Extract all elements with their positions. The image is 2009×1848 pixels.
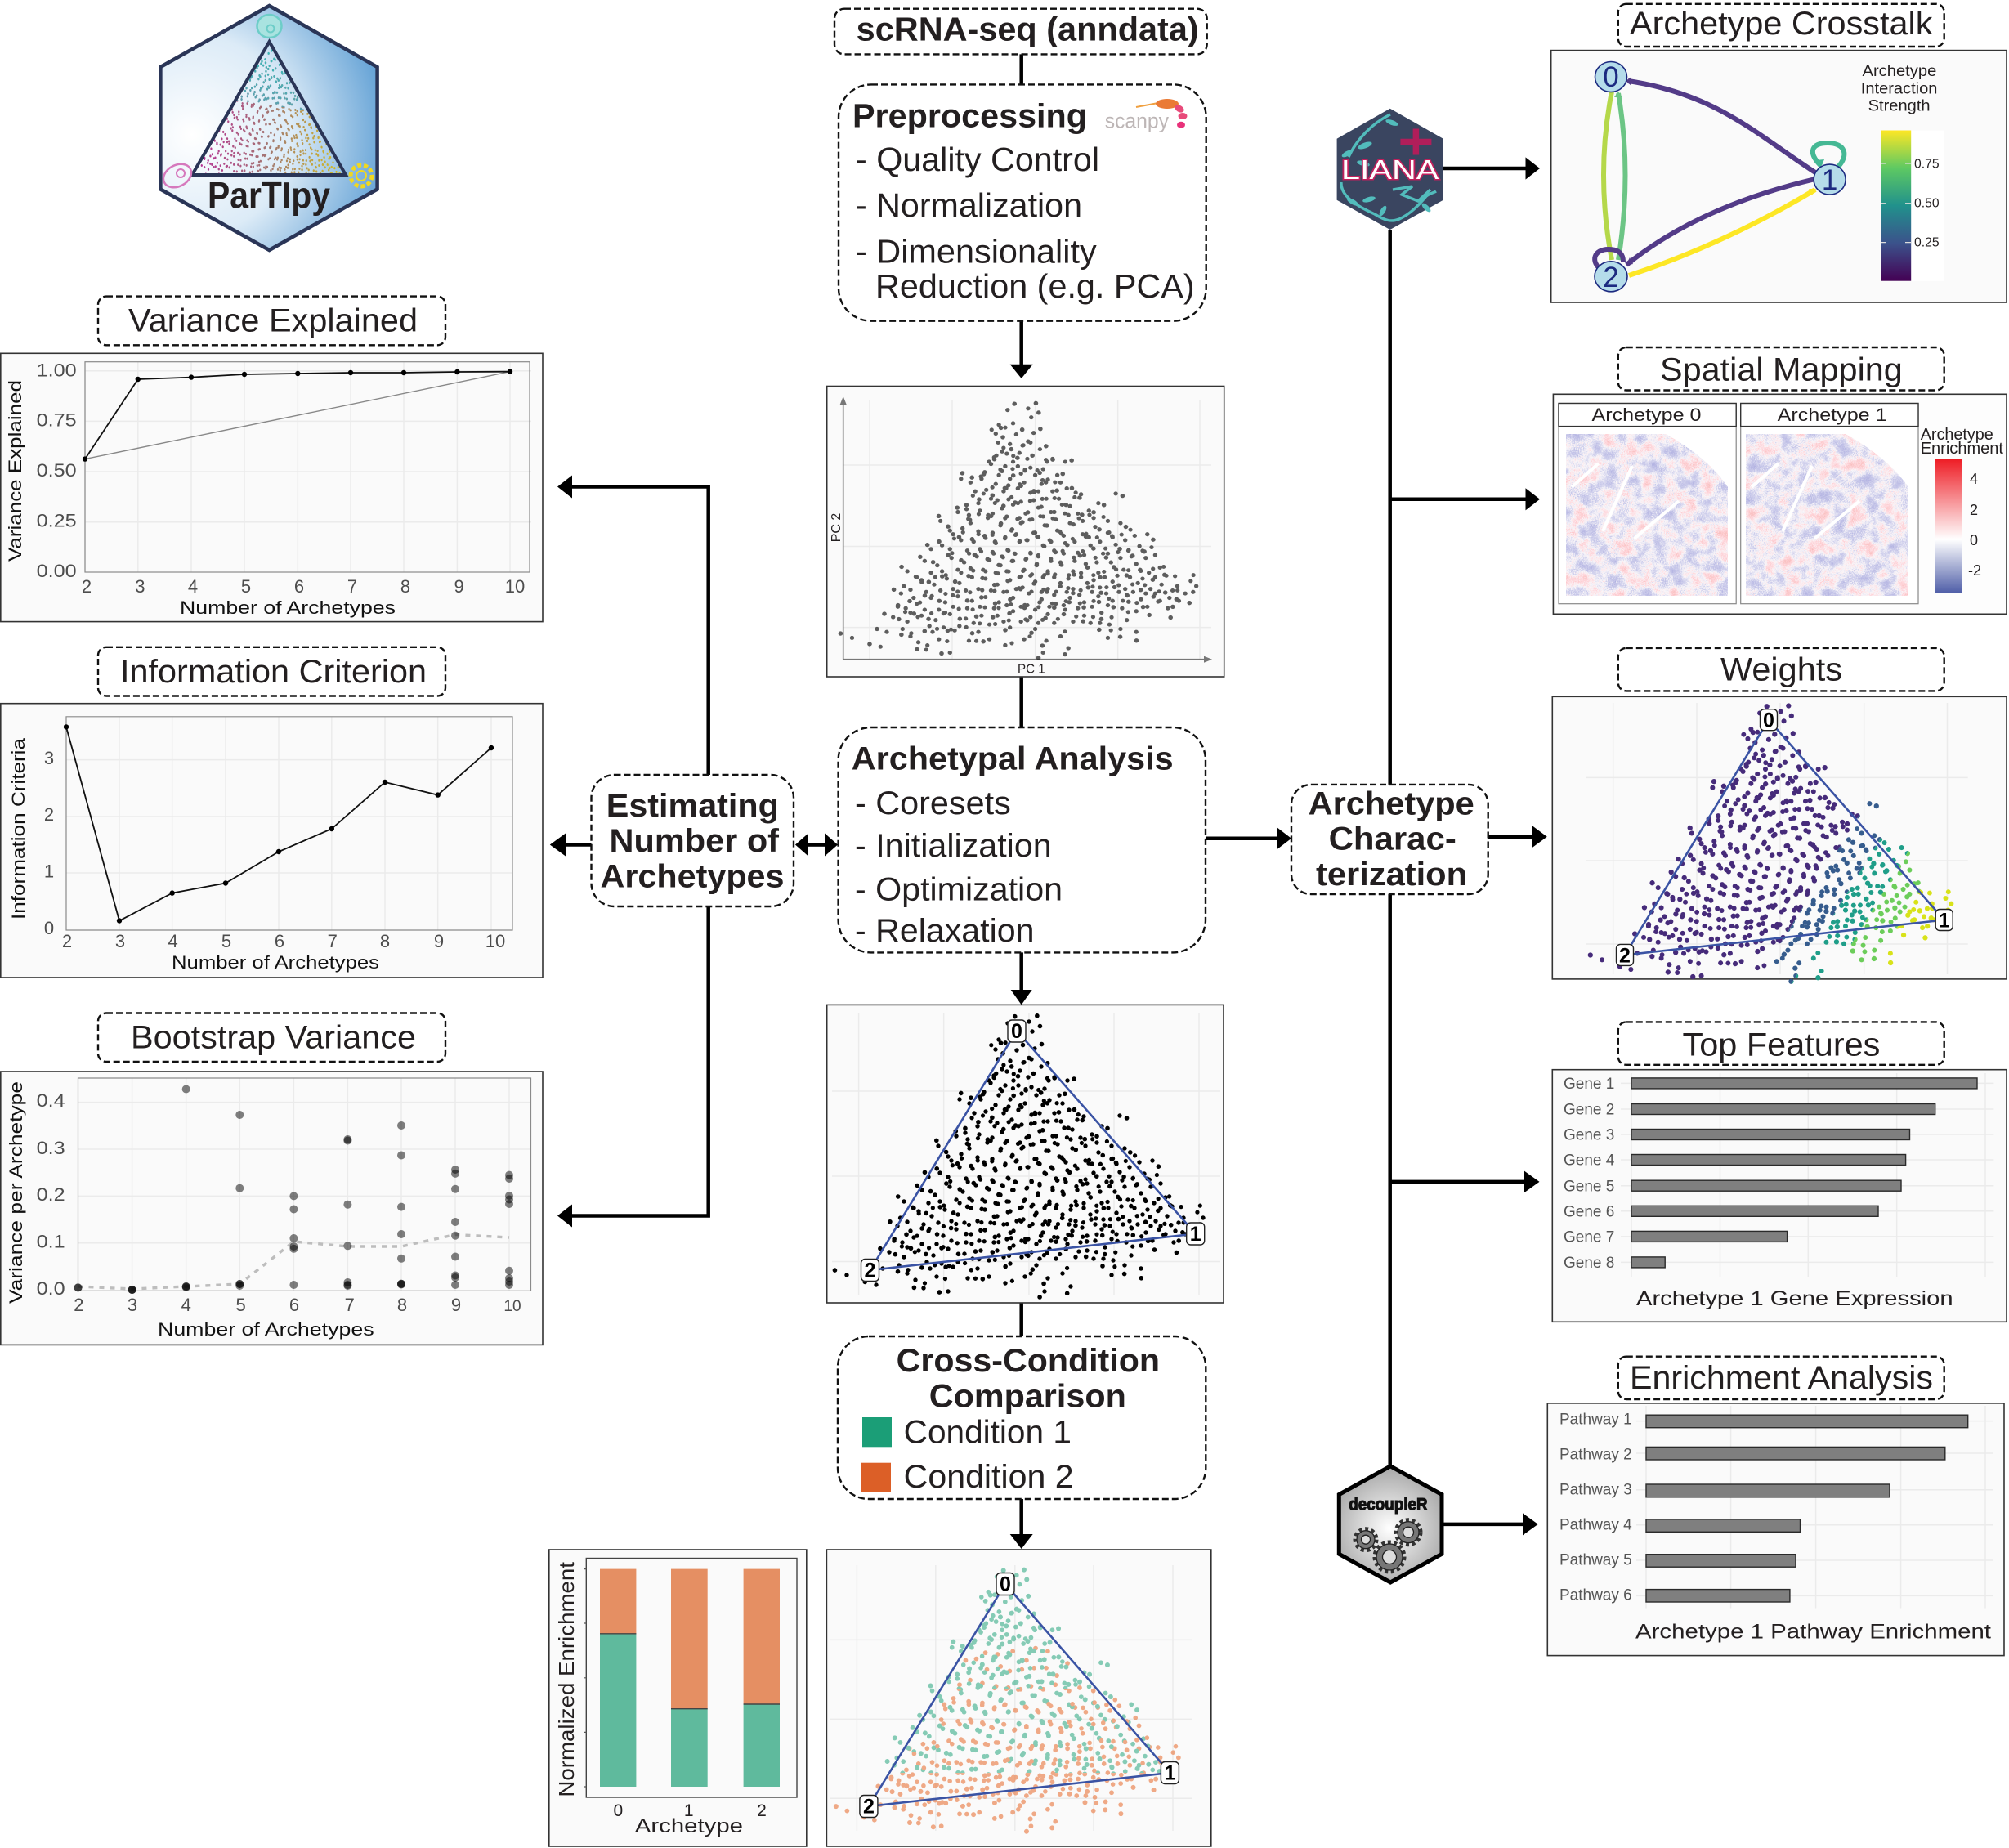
label: archetype 1: 1 <box>1164 1762 1175 1785</box>
panel: variance explained chart: Variance Explained <box>5 380 25 562</box>
mean line <box>78 1234 509 1289</box>
legend: interaction strength: Strength <box>1868 98 1931 115</box>
heading: bootstrap variance: Bootstrap Variance <box>131 1020 416 1056</box>
panel: information criterion chart: 10 <box>485 931 505 951</box>
heading: variance explained <box>98 297 445 345</box>
legend: interaction strength: Archetype <box>1862 63 1936 80</box>
box: preprocessing: Reduction (e.g. PCA) <box>875 267 1195 305</box>
facet: archetype 1: Archetype 1 <box>1778 405 1887 425</box>
points: per-archetype variance <box>74 1085 513 1294</box>
panel: archetype crosstalk network <box>1551 51 2007 302</box>
icon: scanpy logo <box>1105 99 1187 132</box>
panel: top features bar chart: Gene 3 <box>1564 1127 1614 1144</box>
panel: bootstrap variance chart: 4 <box>181 1295 191 1315</box>
box: archetypal analysis: - Initialization <box>855 828 1052 864</box>
heading: information criterion <box>98 647 445 696</box>
icon: decoupleR hexagon logo: decoupleR <box>1349 1496 1428 1515</box>
icon: decoupleR hexagon logo <box>1339 1466 1442 1582</box>
panel: information criterion chart: 2 <box>62 931 72 951</box>
panel: bootstrap variance chart: Number of Archetypes <box>158 1319 374 1340</box>
connector lines: characterization branch <box>1206 168 1533 1524</box>
panel: variance explained chart: 10 <box>505 576 525 597</box>
bars: genes <box>1631 1078 1977 1268</box>
panel: bootstrap variance chart: 2 <box>74 1295 84 1315</box>
panel: top features bar chart: Gene 1 <box>1564 1076 1614 1093</box>
panel: variance explained chart: 0.25 <box>37 511 77 531</box>
panel: enrichment bar chart: Pathway 1 <box>1559 1412 1632 1429</box>
panel: information criterion chart: 3 <box>115 931 125 951</box>
heading: weights: Weights <box>1720 652 1842 688</box>
label: archetype 0: 0 <box>1000 1573 1011 1595</box>
panel: variance explained chart: 2 <box>82 576 92 597</box>
panel: bootstrap variance chart: 8 <box>397 1295 407 1315</box>
node 0 <box>1595 61 1626 93</box>
panel: bootstrap variance chart: 5 <box>235 1295 246 1315</box>
panel: variance explained chart: 0.50 <box>37 460 77 481</box>
panel: bootstrap variance chart <box>1 1072 543 1345</box>
panel: enrichment bar chart: Pathway 6 <box>1559 1586 1632 1604</box>
label: archetype 0: 0 <box>1763 709 1774 732</box>
panel: enrichment bar chart: Pathway 4 <box>1559 1516 1632 1533</box>
heading: information criterion: Information Criterion <box>120 654 427 690</box>
panel: information criterion chart: 2 <box>44 804 54 825</box>
box: archetypal analysis <box>839 727 1206 952</box>
panel: archetypal analysis scatter <box>827 1005 1224 1304</box>
logo: ParTIpy hexagon: ParTIpy <box>208 175 330 217</box>
panel: variance explained chart: 1.00 <box>37 360 77 381</box>
label: archetype 1: 1 <box>1190 1223 1201 1246</box>
bar: archetype 0 <box>600 1569 636 1787</box>
panel: stacked bar chart: Normalized Enrichment <box>554 1561 579 1797</box>
label: archetype 2: 2 <box>865 1259 875 1282</box>
legend: archetype enrichment: 2 <box>1970 502 1978 518</box>
panel: bootstrap variance chart: 0.4 <box>37 1090 65 1111</box>
label: archetype 1: 1 <box>1939 909 1950 932</box>
label: archetype 0 <box>1761 709 1777 732</box>
panel: enrichment bar chart: Archetype 1 Pathway Enrichment <box>1635 1620 1991 1643</box>
panel: variance explained chart: 9 <box>454 576 464 597</box>
panel: top features bar chart: Archetype 1 Gene Expression <box>1636 1287 1953 1310</box>
panel: information criterion chart: 9 <box>434 931 444 951</box>
label: archetype 0: 0 <box>1011 1020 1022 1043</box>
label: archetype 0 <box>996 1573 1014 1595</box>
legend: interaction strength: 0.50 <box>1914 196 1940 211</box>
bars: pathways <box>1646 1415 1968 1602</box>
legend: archetype enrichment: Enrichment <box>1921 440 2003 458</box>
box: archetypal analysis: Archetypal Analysis <box>852 741 1174 776</box>
panel: stacked bar chart: 1 <box>684 1801 694 1820</box>
heading: scRNA-seq (anndata): scRNA-seq (anndata) <box>857 10 1199 47</box>
panel: information criterion chart: 4 <box>168 931 178 951</box>
panel: variance explained chart: 6 <box>294 576 304 597</box>
node 2: 2 <box>1603 262 1619 293</box>
panel: information criterion chart: 8 <box>380 931 390 951</box>
line series: variance explained <box>83 369 512 462</box>
bar: archetype 1 <box>671 1569 708 1787</box>
node 1: 1 <box>1822 164 1837 196</box>
facet: archetype 1 <box>1741 404 1918 604</box>
heading: variance explained: Variance Explained <box>128 302 418 338</box>
legend: interaction strength: Interaction <box>1861 80 1937 97</box>
box: archetypal analysis: - Relaxation <box>855 913 1035 949</box>
connector lines: centre pipeline <box>1019 54 1023 1535</box>
box: preprocessing <box>839 84 1206 321</box>
heading: enrichment analysis: Enrichment Analysis <box>1630 1360 1933 1396</box>
panel: top features bar chart: Gene 5 <box>1564 1178 1614 1195</box>
legend: condition 1: Condition 1 <box>904 1414 1072 1450</box>
label: archetype 1 <box>1161 1762 1179 1785</box>
panel: cross-condition scatter <box>826 1550 1211 1846</box>
box: preprocessing: - Normalization <box>856 186 1082 224</box>
arrowheads <box>550 157 1547 1549</box>
panel: stacked bar chart: 0 <box>614 1801 623 1820</box>
bar: archetype 2 <box>744 1569 780 1787</box>
panel: enrichment bar chart: Pathway 5 <box>1559 1551 1632 1568</box>
panel: bootstrap variance chart: 0.0 <box>37 1278 65 1299</box>
panel: information criterion chart: 7 <box>328 931 338 951</box>
panel: stacked bar chart: 2 <box>757 1801 767 1820</box>
panel: information criterion chart: 3 <box>44 748 54 768</box>
label: archetype 2: 2 <box>863 1795 875 1818</box>
legend: archetype enrichment: Archetype <box>1921 426 1993 444</box>
panel: bootstrap variance chart: 7 <box>345 1295 355 1315</box>
panel: information criterion chart: Number of Archetypes <box>172 952 379 973</box>
panel: PCA scatter: PC 2 <box>830 513 843 542</box>
panel: information criterion chart: 0 <box>44 918 54 938</box>
box: archetype characterization <box>1291 785 1488 894</box>
panel: stacked bar chart: Archetype <box>635 1815 743 1837</box>
legend: archetype enrichment <box>1921 426 2003 593</box>
box: preprocessing: - Quality Control <box>856 141 1099 178</box>
panel: variance explained chart: 4 <box>188 576 198 597</box>
legend: interaction strength: 0.25 <box>1914 235 1940 250</box>
panel: top features bar chart: Gene 4 <box>1564 1152 1615 1170</box>
label: archetype 2 <box>861 1259 879 1282</box>
node 0: 0 <box>1603 61 1619 93</box>
box: cross-condition comparison: Cross-Condition <box>897 1343 1160 1379</box>
panel: enrichment bar chart <box>1547 1403 2004 1656</box>
legend: archetype enrichment: 4 <box>1970 471 1978 487</box>
facet: archetype 0: Archetype 0 <box>1592 405 1702 425</box>
box: estimating number of archetypes: Estimating <box>606 788 779 824</box>
panel: PCA scatter: PC 1 <box>1018 662 1045 676</box>
panel: information criterion chart: 5 <box>221 931 231 951</box>
panel: information criterion chart: 1 <box>44 861 54 882</box>
heading: top features: Top Features <box>1682 1027 1880 1063</box>
legend: archetype enrichment: 0 <box>1970 532 1978 548</box>
panel: top features bar chart: Gene 6 <box>1564 1203 1614 1220</box>
box: estimating number of archetypes <box>592 775 794 906</box>
panel: bootstrap variance chart: Variance per Archetype <box>6 1081 26 1304</box>
panel: PCA scatter <box>827 386 1224 677</box>
icon: LIANA hexagon logo: LIANA <box>1341 154 1439 185</box>
panel: bootstrap variance chart: 3 <box>128 1295 137 1315</box>
line series: information criteria <box>64 724 494 924</box>
panel: top features bar chart: Gene 2 <box>1564 1102 1614 1119</box>
panel: bootstrap variance chart: 9 <box>451 1295 461 1315</box>
box: estimating number of archetypes: Archetypes <box>600 858 785 894</box>
box: archetype characterization: Charac- <box>1329 821 1456 857</box>
panel: information criterion chart: Information Criteria <box>8 737 29 920</box>
label: archetype 1 <box>1935 909 1953 932</box>
node 1 <box>1814 164 1846 196</box>
panel: enrichment bar chart: Pathway 2 <box>1559 1447 1632 1464</box>
panel: information criterion chart <box>1 704 543 978</box>
box: cross-condition comparison <box>838 1336 1206 1499</box>
legend: condition 2: Condition 2 <box>904 1459 1074 1495</box>
panel: bootstrap variance chart: 0.3 <box>37 1138 65 1158</box>
icon: scanpy logo: scanpy <box>1105 108 1169 132</box>
panel: top features bar chart: Gene 8 <box>1564 1255 1614 1272</box>
label: archetype 2: 2 <box>1619 944 1631 967</box>
legend: archetype enrichment: -2 <box>1968 562 1981 579</box>
node 2 <box>1595 262 1627 293</box>
box: archetypal analysis: - Coresets <box>855 785 1011 821</box>
heading: spatial mapping <box>1618 347 1944 391</box>
box: preprocessing: Preprocessing <box>852 96 1087 134</box>
panel: bootstrap variance chart: 0.1 <box>37 1232 65 1252</box>
panel: top features bar chart <box>1552 1070 2007 1322</box>
label: archetype 0 <box>1008 1020 1026 1043</box>
connector lines: estimating branch <box>564 487 709 1216</box>
panel: variance explained chart: 7 <box>347 576 357 597</box>
panel: bootstrap variance chart: 0.2 <box>37 1184 65 1205</box>
heading: top features <box>1618 1022 1944 1065</box>
box: estimating number of archetypes: Number of <box>610 823 780 859</box>
panel: variance explained chart: 8 <box>400 576 410 597</box>
box: preprocessing: - Dimensionality <box>856 232 1097 270</box>
panel: spatial mapping <box>1553 394 2007 614</box>
panel: variance explained chart: Number of Archetypes <box>180 597 396 618</box>
label: archetype 1 <box>1187 1223 1205 1246</box>
panel: stacked bar chart <box>549 1550 807 1846</box>
facet: archetype 0 <box>1559 404 1736 604</box>
label: archetype 2 <box>860 1795 878 1818</box>
panel: weights scatter <box>1552 696 2007 989</box>
box: archetype characterization: terization <box>1316 857 1467 893</box>
panel: variance explained chart <box>1 353 543 622</box>
panel: variance explained chart: 5 <box>241 576 251 597</box>
panel: variance explained chart: 0.00 <box>37 561 77 581</box>
icon: LIANA hexagon logo <box>1337 109 1443 230</box>
panel: enrichment bar chart: Pathway 3 <box>1559 1481 1632 1499</box>
label: archetype 2 <box>1617 944 1633 967</box>
network edges <box>1595 81 1844 275</box>
box: archetypal analysis: - Optimization <box>855 871 1063 907</box>
panel: top features bar chart: Gene 7 <box>1564 1229 1614 1246</box>
panel: bootstrap variance chart: 6 <box>289 1295 299 1315</box>
heading: weights <box>1618 648 1944 691</box>
box: archetype characterization: Archetype <box>1309 786 1474 822</box>
legend: interaction strength: 0.75 <box>1914 157 1940 172</box>
heading: spatial mapping: Spatial Mapping <box>1660 351 1903 387</box>
panel: variance explained chart: 3 <box>135 576 145 597</box>
box: cross-condition comparison: Comparison <box>929 1378 1126 1414</box>
logo: ParTIpy hexagon <box>159 6 378 250</box>
heading: bootstrap variance <box>98 1013 445 1062</box>
legend: interaction strength <box>1861 63 1944 281</box>
panel: bootstrap variance chart: 10 <box>503 1298 521 1315</box>
panel: information criterion chart: 6 <box>275 931 284 951</box>
heading: archetype crosstalk: Archetype Crosstalk <box>1630 6 1933 42</box>
panel: variance explained chart: 0.75 <box>37 409 77 430</box>
